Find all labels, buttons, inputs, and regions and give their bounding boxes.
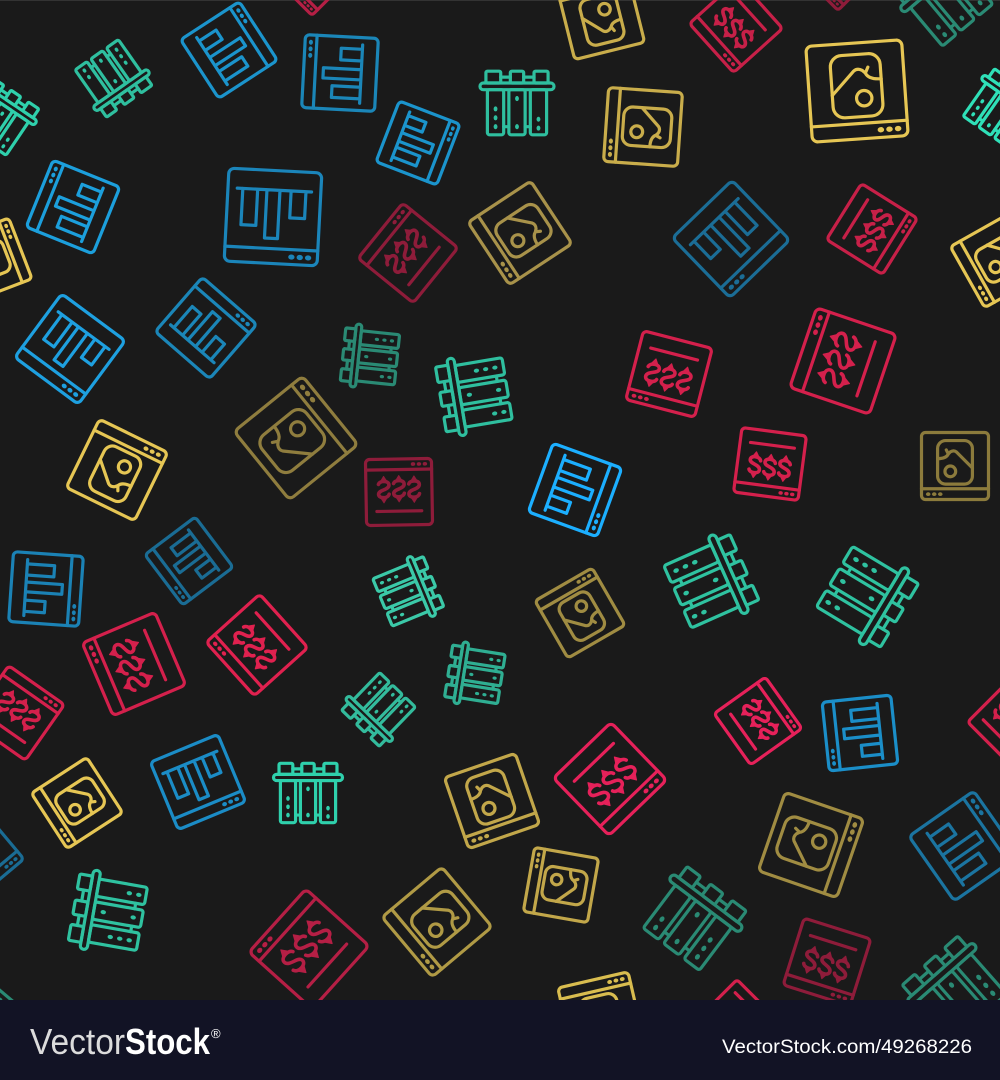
icon: hard drive window <box>535 568 625 658</box>
icon: money window <box>702 980 772 1050</box>
icon: chart window <box>150 734 246 830</box>
icon: chart window <box>528 443 622 537</box>
icon: money window <box>968 680 1000 764</box>
icon: server rack <box>0 965 19 1045</box>
icon: server rack <box>812 539 922 653</box>
icon: hard drive window <box>66 419 168 521</box>
logo <box>30 1021 221 1062</box>
footer bar <box>0 1000 1000 1080</box>
icon: hard drive window <box>523 847 599 923</box>
icon: server rack <box>70 36 156 120</box>
icon: hard drive window <box>604 88 682 166</box>
icon: money window <box>0 666 64 760</box>
icon: server rack <box>67 868 149 958</box>
icon: hard drive window <box>922 432 988 500</box>
icon: money window <box>714 677 802 765</box>
icon: money window <box>626 331 712 417</box>
icon: money window <box>365 458 433 526</box>
icon: chart window <box>181 2 277 98</box>
icon: chart window <box>822 695 898 771</box>
icon: server rack <box>444 640 506 710</box>
icon: chart window <box>909 791 1000 901</box>
icon: server rack <box>370 552 446 632</box>
icon: hard drive window <box>806 40 908 142</box>
icon: money window <box>734 428 806 500</box>
icon: money window <box>358 203 458 303</box>
icon: hard drive window <box>234 376 358 500</box>
icon: chart window <box>9 552 83 626</box>
icon: hard drive window <box>0 218 32 302</box>
icon: hard drive window <box>557 0 645 60</box>
icon: chart window <box>155 277 257 379</box>
icon: hard drive window <box>444 753 540 849</box>
icon: server rack <box>338 668 420 750</box>
icon: chart window <box>672 180 790 298</box>
icon: hard drive window <box>758 792 864 898</box>
icon: server rack <box>660 528 762 636</box>
icon: money window <box>803 0 873 10</box>
logo: ® <box>211 1026 221 1041</box>
icon: hard drive window <box>558 972 644 1058</box>
icon: chart window <box>224 168 322 266</box>
icon: money window <box>277 0 347 15</box>
logo: Stock <box>125 1021 211 1062</box>
icon: server rack <box>480 71 554 135</box>
icon: server rack <box>891 0 999 51</box>
icon: hard drive window <box>950 212 1000 308</box>
icon: server rack <box>958 66 1000 150</box>
icon: money window <box>82 612 186 716</box>
icon: chart window <box>0 809 24 901</box>
icon: server rack <box>340 323 400 391</box>
icon: server rack <box>897 932 1000 1046</box>
icon: money window <box>553 722 667 836</box>
icon: chart window <box>15 294 125 404</box>
icon: money window <box>206 594 308 696</box>
icon: server rack <box>434 350 514 438</box>
icon: chart window <box>302 35 378 111</box>
icon: chart window <box>145 517 233 605</box>
icon: server rack <box>636 862 752 976</box>
icon: money window <box>790 308 896 414</box>
url text: VectorStock.com/49268226 <box>722 1037 972 1058</box>
icon: chart window <box>26 160 120 254</box>
icon: hard drive window <box>31 757 123 849</box>
icon: money window <box>827 184 917 274</box>
icon: money window <box>249 889 369 1009</box>
icon: money window <box>689 0 783 73</box>
icon: chart window <box>376 101 460 185</box>
icon: server rack <box>274 763 342 823</box>
icon: hard drive window <box>382 867 492 977</box>
icon: server rack <box>0 75 43 159</box>
logo: Vector <box>30 1021 125 1062</box>
icon: hard drive window <box>468 181 572 285</box>
icon: money window <box>783 918 871 1006</box>
